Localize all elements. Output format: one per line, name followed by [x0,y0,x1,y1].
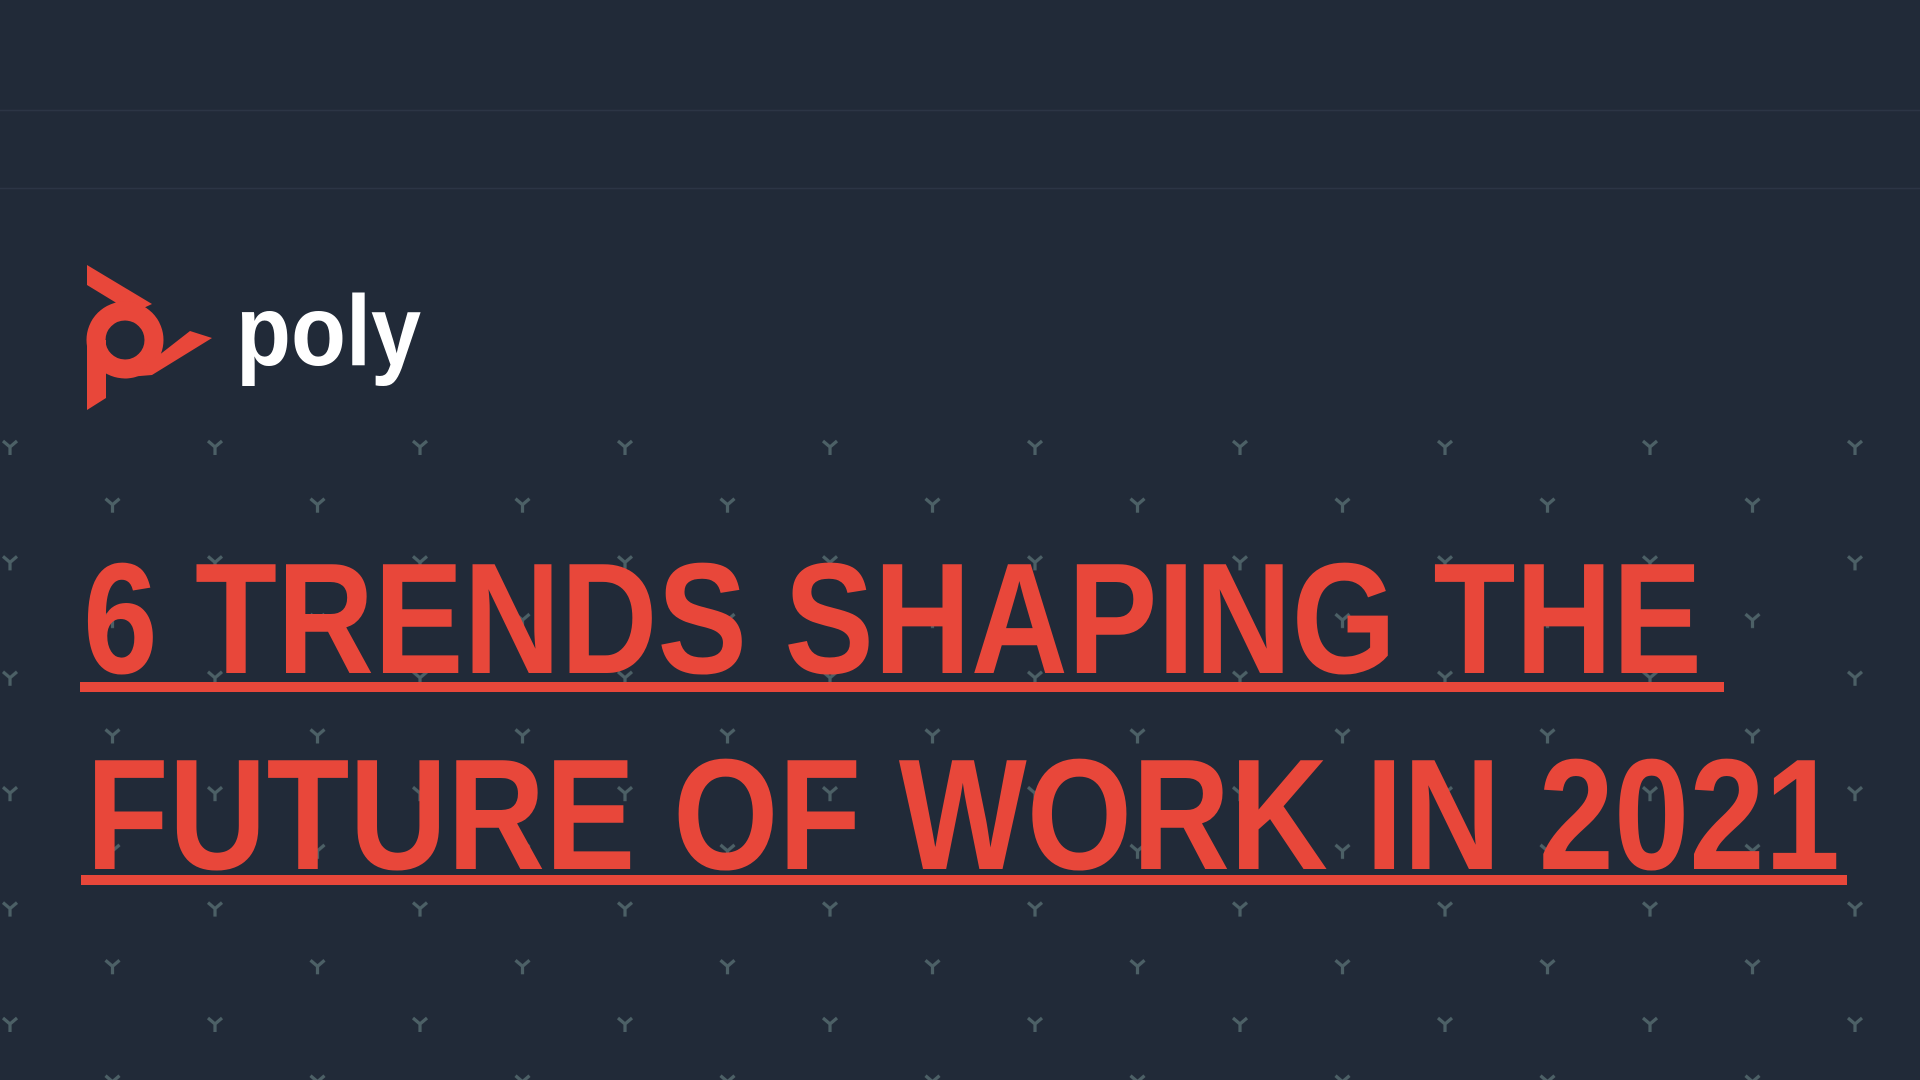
logo: poly [87,265,421,410]
icon: poly mark [87,265,212,410]
title [80,531,1847,903]
wordmark: poly [236,275,421,387]
